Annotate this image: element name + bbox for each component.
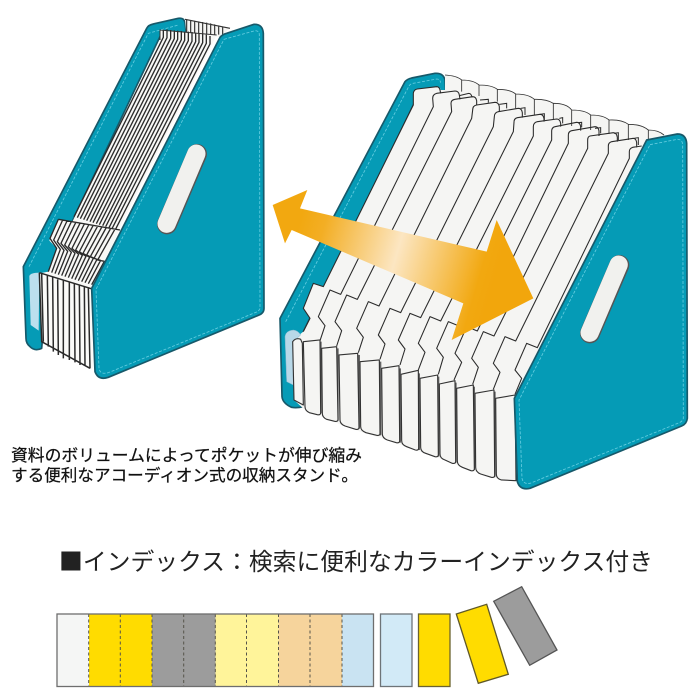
index colour strip: [57, 614, 374, 686]
back panel: [23, 18, 187, 350]
back panel: [280, 73, 446, 408]
stitching on front panel: [519, 139, 683, 484]
tilted tab: yellow: [456, 604, 508, 683]
description text: 資料のボリュームによってポケットが伸び縮み: [11, 442, 362, 466]
stitching on back panel: [286, 79, 441, 322]
description text: する便利なアコーディオン式の収納スタンド。: [11, 462, 358, 486]
stitching: [96, 31, 260, 373]
pocket fronts: [39, 273, 93, 369]
description text: [11, 442, 362, 486]
front panel: [514, 134, 687, 489]
pocket fronts: [293, 339, 516, 481]
handle cutout: [590, 265, 619, 333]
handle cutout: [167, 154, 197, 224]
back gusset folds: [185, 19, 230, 37]
tilted tab: grey: [494, 587, 557, 665]
loose tab: yellow: [418, 614, 450, 686]
stand: expanded accordion file: [273, 73, 687, 489]
arrow: expands and contracts: [273, 190, 533, 340]
front panel: [92, 24, 264, 378]
heading: index: ■インデックス：検索に便利なカラーインデックス付き: [59, 543, 653, 577]
small index tabs behind: [459, 93, 638, 145]
loose tab: light blue: [380, 614, 412, 686]
back gusset folds: [445, 75, 664, 145]
stand: compact accordion file: [23, 18, 264, 378]
pocket label: [285, 330, 301, 385]
pocket dividers with index tabs: [303, 87, 642, 394]
pocket label: [29, 273, 39, 331]
pocket body: [293, 75, 664, 482]
lower index tab band: [48, 219, 120, 287]
pockets squeezed together: [39, 29, 217, 368]
